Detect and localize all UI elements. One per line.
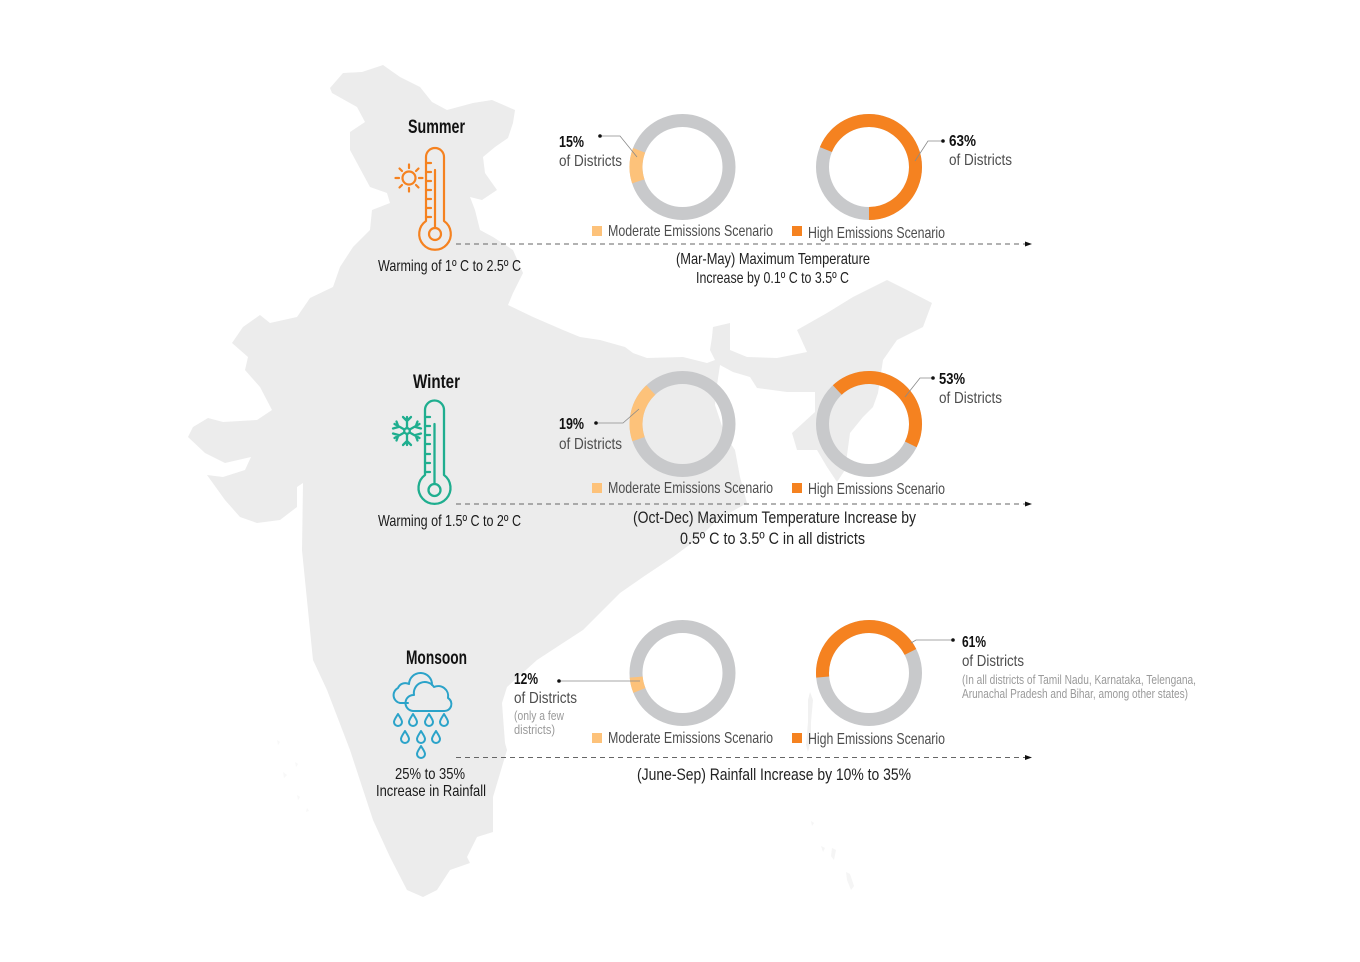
legend: monsoon scenarios: Moderate Emissions Scenario [608, 730, 773, 747]
callout: high 63% [915, 133, 1012, 169]
donut: moderate 12% [622, 612, 743, 734]
callout: high 61%: (In all districts of Tamil Nadu, Karnataka, Telengana, [962, 673, 1196, 687]
callout: high 53% [905, 371, 1002, 407]
legend: winter scenarios: Moderate Emissions Scenario [608, 480, 773, 497]
text: monsoon rainfall increase [376, 766, 486, 800]
callout: high 63%: 63% [949, 133, 976, 150]
arrow: winter dashed [456, 502, 1032, 506]
text: monsoon rainfall increase: Increase in Rainfall [376, 783, 486, 800]
donut: high 53% [803, 358, 935, 490]
callout: high 61%: 61% [962, 634, 986, 651]
heading: winter: Winter [413, 372, 460, 393]
arrow: summer dashed [456, 242, 1032, 246]
callout: moderate 12% [514, 671, 640, 737]
caption: summer: (Mar-May) Maximum Temperature [676, 251, 870, 268]
callout: high 53%: 53% [939, 371, 965, 388]
callout: moderate 12%: districts) [514, 723, 555, 737]
icon: rain cloud [394, 673, 451, 758]
donut: moderate 15% [624, 108, 741, 226]
map: India silhouette [188, 65, 932, 897]
caption: winter [633, 508, 916, 548]
donut: moderate 19% [623, 365, 742, 483]
panel: monsoon [376, 612, 1196, 800]
donut: high 61% [819, 623, 919, 723]
icon: thermometer with snowflake [393, 400, 450, 504]
callout: moderate 12%: (only a few [514, 709, 565, 723]
icon: thermometer with sun [396, 148, 451, 250]
legend: summer scenarios: Moderate Emissions Scenario [608, 223, 773, 240]
callout: moderate 12%: 12% [514, 671, 538, 688]
callout: high 53%: of Districts [939, 390, 1002, 407]
legend: summer scenarios [592, 223, 945, 242]
donut: high 63% [808, 106, 930, 228]
callout: moderate 19%: 19% [559, 416, 584, 433]
callout: moderate 12%: of Districts [514, 690, 577, 707]
caption: summer [676, 251, 870, 287]
text: monsoon rainfall increase: 25% to 35% [395, 766, 465, 783]
legend: winter scenarios: High Emissions Scenario [808, 481, 945, 498]
callout: high 63%: of Districts [949, 152, 1012, 169]
callout: moderate 19% [559, 409, 639, 453]
caption: winter: 0.5º C to 3.5º C in all districts [680, 529, 865, 548]
callout: high 61%: of Districts [962, 653, 1024, 670]
panel: summer [378, 106, 1032, 287]
callout: moderate 15%: of Districts [559, 153, 622, 170]
callout: moderate 19%: of Districts [559, 436, 622, 453]
legend: summer scenarios: High Emissions Scenario [808, 225, 945, 242]
legend: winter scenarios [592, 480, 945, 498]
caption: summer: Increase by 0.1º C to 3.5º C [696, 270, 849, 287]
callout: high 61% [911, 634, 1196, 701]
legend: monsoon scenarios: High Emissions Scenario [808, 731, 945, 748]
heading: monsoon: Monsoon [406, 648, 467, 669]
caption: monsoon: (June-Sep) Rainfall Increase by 10% to 35% [637, 765, 911, 784]
callout: high 61%: Arunachal Pradesh and Bihar, among other states) [962, 687, 1188, 701]
text: summer warming range: Warming of 1º C to 2.5º C [378, 258, 521, 275]
caption: winter: (Oct-Dec) Maximum Temperature Increase by [633, 508, 916, 527]
callout: moderate 15% [559, 134, 637, 170]
callout: moderate 15%: 15% [559, 134, 584, 151]
legend: monsoon scenarios [592, 730, 945, 748]
text: winter warming range: Warming of 1.5º C to 2º C [378, 513, 521, 530]
heading: summer: Summer [408, 117, 465, 138]
arrow: monsoon dashed [456, 755, 1032, 760]
panel: winter [378, 358, 1032, 548]
